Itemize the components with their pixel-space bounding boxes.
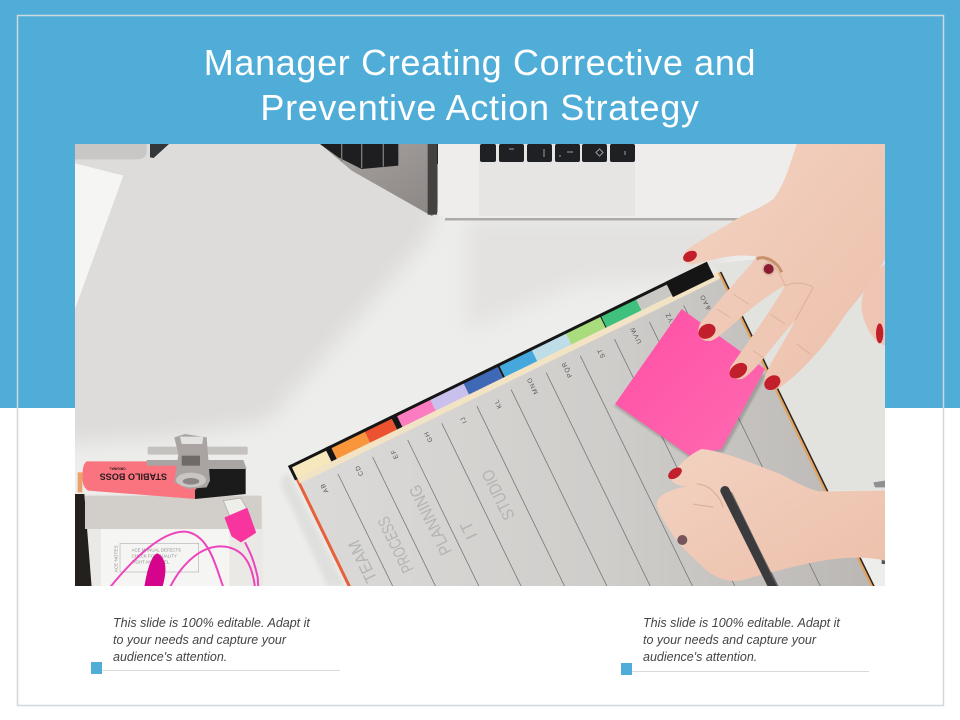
laptop corner (75, 144, 147, 159)
note text block left: to your needs and capture your (113, 633, 287, 647)
grey page (300, 278, 872, 589)
marker tip (144, 553, 165, 587)
dark laptop (320, 144, 440, 216)
red nails (681, 248, 883, 393)
column labels: XYZ (664, 311, 678, 328)
highlighter, clip and cable pouch (75, 434, 263, 587)
handwritten notes on notebook: STUDIO (478, 466, 519, 523)
highlighter, clip and cable pouch: FIGHT AND LABEL (132, 559, 170, 564)
handwritten notes on notebook: IT (456, 518, 481, 542)
pencil (725, 491, 773, 587)
highlighter, clip and cable pouch: ACE MANUAL DEFECTS (132, 547, 181, 552)
title: Preventive Action Strategy (260, 87, 700, 128)
transparent pouch (84, 494, 92, 586)
top left objects (75, 144, 440, 309)
beige strip (297, 272, 721, 484)
highlighter, clip and cable pouch: ORIGINAL (109, 466, 126, 470)
handwritten notes on notebook (348, 470, 514, 584)
notebook (280, 260, 875, 600)
ring (757, 258, 782, 276)
note text block right (621, 616, 869, 675)
column labels: ST (596, 347, 607, 359)
column labels: CD (354, 464, 365, 477)
note text block left (91, 616, 340, 674)
column labels: MNO (526, 376, 540, 395)
upper hand (681, 144, 885, 393)
column labels: PQR (560, 360, 574, 378)
blue header background (0, 0, 960, 408)
title: Manager Creating Corrective and (204, 42, 756, 83)
white paper sheet (75, 163, 123, 309)
column labels: GH (423, 430, 435, 443)
column labels: UVW (629, 325, 643, 345)
note text block left: This slide is 100% editable. Adapt it (113, 616, 310, 630)
column labels: KL (493, 397, 504, 409)
highlighter, clip and cable pouch: ACE NOTES (114, 545, 119, 572)
highlighter (82, 461, 198, 499)
title (204, 42, 756, 128)
sticky note (613, 309, 767, 458)
column labels: EF (390, 448, 400, 460)
note text block left: audience's attention. (113, 650, 227, 664)
thumb nail and ring (668, 468, 682, 480)
column rules (338, 306, 823, 592)
USB plug (223, 498, 248, 517)
column labels: &AO (699, 293, 713, 311)
note text block right: This slide is 100% editable. Adapt it (643, 616, 840, 630)
handwritten notes on notebook: PROCESS (374, 514, 418, 576)
highlighter, clip and cable pouch: STABILO BOSS (100, 471, 167, 481)
colour index tabs (288, 262, 714, 481)
column labels: AB (319, 481, 330, 494)
orange notebook cover edge (296, 272, 721, 586)
pencil on left (75, 494, 92, 587)
laptop with keyboard (438, 144, 738, 220)
column labels: IJ (459, 415, 469, 424)
white card (101, 529, 229, 587)
highlighter, clip and cable pouch: CHECK FOR QUALITY (132, 553, 177, 558)
photo: desk with notebook and hands (55, 124, 885, 600)
handwritten notes on notebook: PLANNING (405, 482, 456, 558)
pink cable (110, 532, 258, 587)
column labels (317, 292, 713, 497)
handwritten notes on notebook: TEAM (344, 537, 381, 586)
note text block right: audience's attention. (643, 650, 757, 664)
metal clip (147, 434, 248, 489)
note text block right: to your needs and capture your (643, 633, 817, 647)
lower hand with pencil (657, 449, 885, 587)
